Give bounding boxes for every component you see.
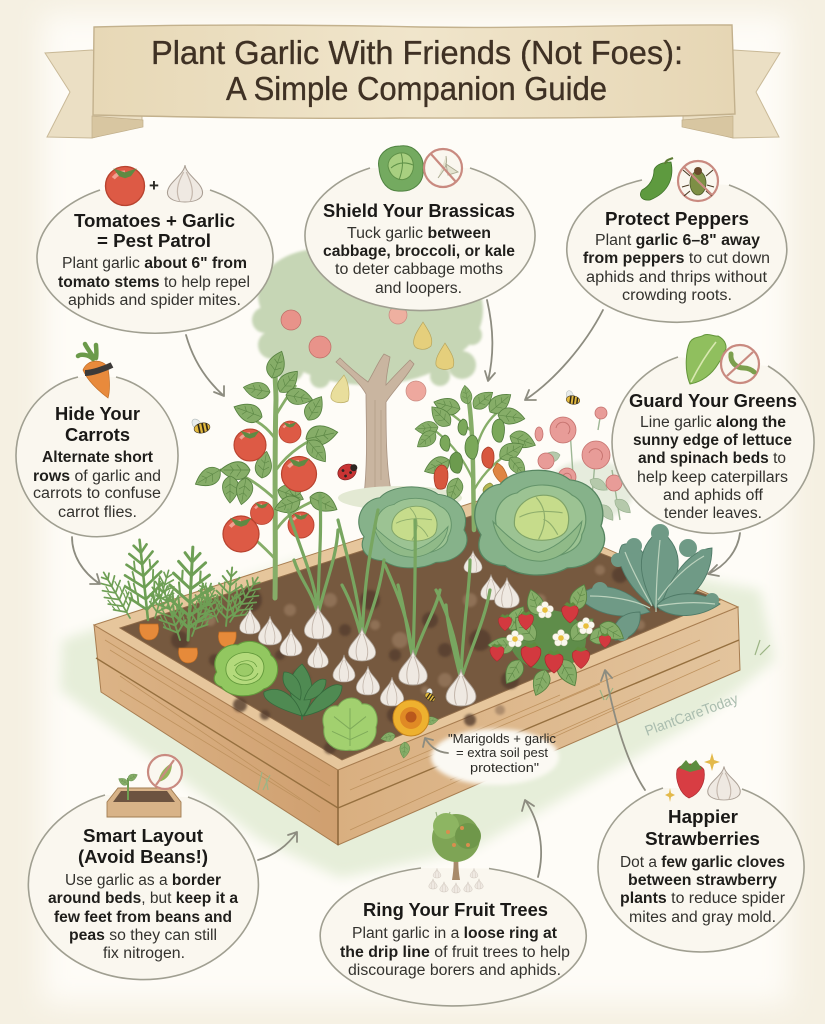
right ribbon tail [683, 50, 780, 138]
icon: carrot with mask [78, 344, 112, 398]
body text: Plant garlic about 6" from [62, 255, 247, 272]
panel: smart layout: fix nitrogen. [103, 945, 185, 962]
icon: lettuce leaf [686, 334, 726, 384]
heading: Ring Your Fruit Trees [363, 900, 548, 920]
fruit tree background [252, 249, 483, 510]
panel: greens: tender leaves. [664, 505, 762, 522]
body text: Plant garlic 6–8" away [595, 232, 760, 249]
panel: strawberries: between strawberry [628, 872, 777, 889]
panel: carrots: rows of garlic and [33, 468, 161, 485]
panel: greens: help keep caterpillars [637, 469, 788, 486]
trunk [336, 354, 414, 495]
arrow: brassicas to cabbage [485, 300, 495, 381]
marigold [380, 700, 439, 759]
body text: Plant garlic in a loose ring at [352, 925, 557, 942]
grass tufts [258, 640, 770, 830]
panel: smart layout: peas so they can still [69, 927, 217, 944]
icon: sparkles [665, 753, 720, 802]
panel: greens: and aphids off [663, 487, 764, 504]
second lettuce [323, 698, 377, 750]
plus sign: + [149, 176, 159, 195]
ground wash under bed [60, 560, 775, 878]
icon: cabbage [379, 146, 423, 191]
body text: Line garlic along the [640, 414, 786, 431]
pepper plant [413, 384, 538, 530]
icon: mini raised bed [107, 772, 181, 817]
panel: greens [612, 334, 814, 533]
title banner [45, 25, 780, 138]
banner body [93, 25, 735, 118]
arrow: peppers to pepper plant [525, 310, 603, 400]
panel: carrots: carrot flies. [58, 504, 137, 521]
icon: pepper [640, 158, 673, 200]
icon: tree with garlic ring [429, 813, 483, 893]
icon: no beans [148, 755, 182, 789]
bee near marigold [422, 686, 439, 703]
bed rim [94, 497, 738, 770]
icon: no beetle [678, 161, 718, 201]
panel: carrots: carrots to confuse [33, 485, 161, 502]
spinach [264, 664, 342, 720]
arrow: carrots to carrot plants [72, 537, 100, 584]
watermark: PlantCareToday [643, 691, 741, 740]
title text: Plant Garlic With Friends (Not Foes): [151, 34, 683, 71]
panel: smart layout: around beds, but keep it a [48, 890, 238, 907]
arrow: layout to bed [258, 832, 297, 860]
panel: strawberries: Strawberries [645, 829, 760, 849]
panel: smart layout: (Avoid Beans!) [78, 847, 208, 867]
body text: Tuck garlic between [347, 225, 491, 242]
cabbage right [475, 470, 605, 575]
bed right face [338, 607, 740, 845]
panel: carrots: Carrots [65, 425, 130, 445]
panel: brassicas: cabbage, broccoli, or kale [323, 243, 515, 260]
tree ground wash [338, 486, 462, 510]
icon: garlic [708, 766, 740, 800]
panel: strawberries [598, 753, 804, 952]
panel: greens: sunny edge of lettuce [633, 432, 792, 449]
left ribbon fold [92, 116, 143, 138]
icon: no caterpillar [721, 345, 759, 383]
bed left face [94, 625, 338, 845]
callout arrow [423, 738, 448, 753]
panel: peppers: aphids and thrips without [586, 269, 768, 286]
lettuce [214, 641, 278, 696]
kale [578, 524, 720, 641]
arrow: strawberries to bed [601, 670, 645, 790]
soil [120, 510, 720, 760]
panel: tomatoes + garlic: aphids and spider mites. [68, 292, 241, 309]
bee near tomato [189, 415, 211, 435]
panel: smart layout: few feet from beans and [54, 909, 232, 926]
icon: garlic [167, 165, 203, 202]
canopy [252, 249, 483, 388]
garlic plants [288, 495, 490, 706]
rose bush [535, 407, 634, 523]
panel: peppers: crowding roots. [622, 287, 732, 304]
arrow: tomatoes to plant [186, 335, 224, 396]
title banner: A Simple Companion Guide [226, 70, 607, 107]
panel: brassicas: to deter cabbage moths [335, 261, 503, 278]
panel: peppers: from peppers to cut down [583, 250, 770, 267]
marigold callout: protection" [470, 761, 539, 775]
strawberry plant [488, 582, 628, 698]
left ribbon tail [45, 50, 142, 138]
cabbage left [359, 487, 467, 568]
body text: Dot a few garlic cloves [620, 854, 785, 871]
panel: greens: and spinach beds to [638, 450, 786, 467]
heading: Tomatoes + Garlic [74, 211, 235, 231]
panel: brassicas: and loopers. [375, 280, 462, 297]
marigold callout: = extra soil pest [456, 746, 549, 760]
icon: strawberry [677, 760, 704, 798]
icon: no moth [424, 149, 462, 187]
panel: carrots [16, 344, 178, 537]
right ribbon fold [682, 116, 733, 138]
panel: strawberries: mites and gray mold. [629, 909, 776, 926]
carrots [93, 538, 268, 663]
heading: Hide Your [55, 404, 140, 424]
callout text: "Marigolds + garlic [448, 732, 556, 746]
panel: brassicas [305, 146, 535, 311]
panel: fruit trees [320, 813, 586, 1006]
arrow: greens to kale [708, 533, 740, 576]
ladybug [335, 460, 361, 483]
garlic cloves in soil [240, 551, 519, 706]
body text: Alternate short [42, 449, 153, 466]
bee near pepper [564, 389, 581, 405]
marigold callout [423, 729, 559, 785]
raised garden bed [94, 497, 740, 845]
body text: Use garlic as a border [65, 872, 221, 889]
panel: fruit trees: the drip line of fruit trees to help [340, 944, 570, 961]
tomato plant [192, 348, 341, 598]
panel: tomatoes + garlic [37, 165, 273, 333]
panel: fruit trees: discourage borers and aphids. [348, 962, 561, 979]
icon: tomato [106, 166, 144, 206]
panel: tomatoes + garlic: tomato stems to help repel [58, 274, 250, 291]
heading: Guard Your Greens [629, 391, 797, 411]
heading: Protect Peppers [605, 209, 749, 229]
heading: Smart Layout [83, 826, 203, 846]
heading: Happier [668, 807, 738, 827]
panel: tomatoes + garlic: = Pest Patrol [97, 231, 211, 251]
panel: smart layout [28, 755, 258, 980]
panel: strawberries: plants to reduce spider [620, 890, 785, 907]
heading: Shield Your Brassicas [323, 201, 515, 221]
fruit [281, 306, 454, 403]
panel: peppers [567, 158, 787, 322]
arrow: fruit trees to bed [522, 800, 541, 877]
